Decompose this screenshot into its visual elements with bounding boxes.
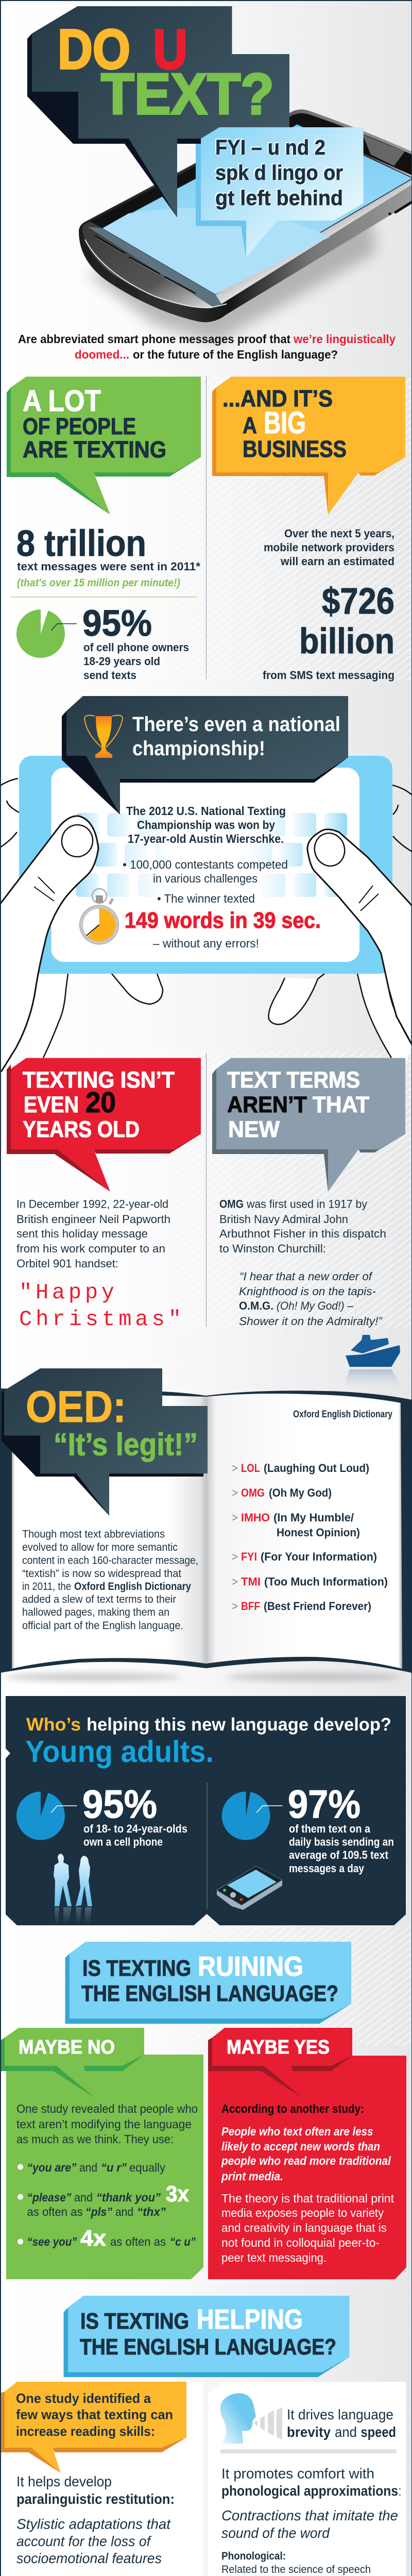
panel: texting isn't 20	[7, 1058, 201, 1332]
pie: 97 percent text daily	[222, 1792, 270, 1840]
list: dictionary terms: FYI	[241, 1550, 257, 1563]
text block: finding: likely to accept new words than	[221, 2140, 380, 2153]
text block: phonological approximations: Contractions that imitate the	[221, 2507, 398, 2523]
column divider	[206, 376, 207, 679]
forecast text	[264, 527, 394, 568]
list: usage stats: and	[115, 2205, 133, 2218]
text block: OMG origin: OMG	[219, 1197, 244, 1211]
stat caption: send texts	[83, 669, 136, 682]
speech bubble: national championship: There’s even a national	[132, 713, 340, 736]
text block: theory: not found in colloquial peer-to-	[221, 2236, 380, 2249]
text block: OMG origin: to Winston Churchill:	[219, 1242, 326, 1255]
text block: phonological approximations: sound of the word	[221, 2525, 330, 2541]
quote: Fisher dispatch	[239, 1270, 383, 1328]
championship text: • The winner texted	[157, 892, 255, 905]
panel: paralinguistic restitution: One study identified a	[16, 2391, 151, 2406]
stat: 95%: 95%	[82, 1783, 157, 1827]
text block: OMG origin: British Navy Admiral John	[219, 1213, 348, 1226]
speech bubble: national championship	[62, 696, 348, 815]
stat: 97%: 97%	[288, 1783, 360, 1827]
text block: OED paragraph: content in each 160-character message,	[22, 1555, 198, 1566]
panel: texting isn't 20: YEARS OLD	[23, 1117, 140, 1142]
championship text: – without any errors!	[153, 937, 259, 950]
heading: is texting helping: IS TEXTING	[80, 2309, 189, 2334]
text block: OMG origin: was first used in 1917 by	[246, 1197, 367, 1211]
intro question	[18, 332, 396, 361]
panel: big business: A	[243, 412, 257, 438]
text block: theory: peer text messaging.	[221, 2251, 327, 2264]
icon: stopwatch	[79, 889, 118, 944]
text block: definition	[221, 2550, 399, 2576]
list: dictionary terms: (For Your Information)	[261, 1550, 377, 1563]
text block: finding	[221, 2125, 391, 2183]
text block: definition: Phonological:	[221, 2550, 286, 2562]
list: usage stats: “see you”	[27, 2235, 77, 2248]
list: usage stats: “thx”	[137, 2205, 166, 2218]
list: usage stats: “c u”	[170, 2235, 196, 2248]
speech bubble: FYI: gt left behind	[215, 186, 343, 210]
list: usage stats: “you are”	[27, 2161, 77, 2174]
text block: restitution	[16, 2473, 175, 2566]
quote: Happy Christmas: "Happy	[19, 1280, 114, 1305]
stat caption: 18-29 years old	[83, 655, 160, 668]
list: dictionary terms: >	[232, 1575, 238, 1588]
championship text: Championship was won by	[137, 818, 275, 832]
championship text: 17-year-old Austin Wierschke.	[128, 832, 284, 845]
forecast text: Over the next 5 years,	[284, 527, 394, 540]
panel: brevity and phonological: brevity	[287, 2424, 331, 2440]
quote: Fisher dispatch: O.M.G.	[239, 1299, 273, 1312]
heading: is texting helping	[64, 2296, 349, 2377]
panel: brevity and phonological: speed	[360, 2424, 396, 2440]
text block: study: as much as we think. They use:	[16, 2132, 174, 2146]
list: dictionary terms: (Too Much Information)	[264, 1575, 388, 1588]
stat caption	[289, 1822, 394, 1875]
text block: restitution: paralinguistic restitution:	[16, 2491, 175, 2507]
heading: is texting helping: HELPING	[197, 2304, 303, 2335]
heading: is texting helping: THE ENGLISH LANGUAGE?	[80, 2334, 336, 2360]
list: dictionary terms: (Best Friend Forever)	[264, 1600, 371, 1613]
panel: text terms aren't new: AREN’T	[227, 1092, 307, 1117]
text block: another study: According to another study:	[221, 2102, 364, 2115]
phone illustration	[79, 109, 412, 343]
title: TEXT?: TEXT?	[101, 62, 274, 126]
list: dictionary terms: >	[232, 1600, 238, 1613]
stat caption: of cell phone owners	[83, 641, 189, 654]
stat caption	[83, 641, 189, 682]
list: usage stats: “please”	[27, 2191, 72, 2204]
text block: OMG origin: Arbuthnot Fisher in this dispatch	[219, 1227, 386, 1240]
panel: text terms aren't new: TEXT TERMS	[227, 1067, 360, 1093]
championship text	[123, 804, 321, 950]
list: usage stats	[18, 2161, 196, 2251]
list: dictionary terms: >	[232, 1550, 238, 1563]
panel: texting isn't 20: 20	[85, 1086, 116, 1119]
panel: paralinguistic restitution: few ways that texting can	[16, 2407, 173, 2422]
pie: 95 percent	[16, 609, 65, 658]
list: dictionary terms: >	[232, 1511, 238, 1524]
list: dictionary terms: OMG	[241, 1486, 265, 1499]
stat caption: of 18- to 24-year-olds	[83, 1822, 187, 1835]
list: usage stats: 3x	[166, 2181, 189, 2207]
quote: Happy Christmas	[19, 1280, 181, 1332]
panel: big business: BIG	[264, 405, 306, 440]
list: usage stats: equally	[129, 2161, 165, 2174]
text block: study	[16, 2102, 198, 2146]
panel: brevity and phonological	[208, 2382, 406, 2576]
panel: maybe yes	[208, 2028, 406, 2279]
list: dictionary terms: (In My Humble/	[273, 1511, 354, 1524]
stat: 149 words: 149 words in 39 sec.	[125, 908, 321, 933]
championship text: The 2012 U.S. National Texting	[126, 804, 286, 818]
quote: Happy Christmas: Christmas"	[19, 1307, 181, 1332]
text block: first text: In December 1992, 22-year-old	[16, 1197, 168, 1211]
text block: theory: and creativity in language that is	[221, 2221, 387, 2234]
panel: open book	[0, 1368, 412, 1681]
text block: study: text aren’t modifying the language	[16, 2117, 192, 2131]
panel: young adults: helping this new language develop?	[87, 1715, 391, 1735]
list: usage stats: as often as	[27, 2205, 82, 2218]
stat note: (that's over 15 million per minute!)	[17, 577, 180, 589]
stat: $726 billion: $726	[322, 581, 394, 622]
icon: silhouettes	[54, 1854, 92, 1924]
intro question: or the future of the English language?	[133, 348, 338, 361]
panel: young adults: Who’s	[26, 1715, 81, 1735]
speech bubble: FYI: FYI – u nd 2	[215, 135, 325, 159]
forecast text: mobile network providers	[264, 541, 394, 554]
text block: finding: print media.	[221, 2170, 283, 2183]
speech bubble: FYI	[196, 127, 364, 258]
text block: study: One study revealed that people who	[16, 2102, 198, 2115]
list: dictionary terms: LOL	[241, 1462, 260, 1475]
stat: 95%: 95%	[82, 603, 152, 644]
list: dictionary terms: IMHO	[241, 1511, 270, 1524]
panel: young adults: Young adults.	[25, 1735, 214, 1769]
list: dictionary terms: BFF	[241, 1600, 260, 1613]
quote: Fisher dispatch: Shower it on the Admiralty!”	[239, 1315, 383, 1328]
panel: a lot of people	[7, 377, 201, 682]
heading: is texting ruining: IS TEXTING	[82, 1956, 191, 1981]
list: usage stats: “pls”	[85, 2205, 112, 2218]
text block: restitution: It helps develop	[16, 2473, 112, 2489]
panel: big business: ...AND IT’S	[222, 385, 333, 412]
list: dictionary terms: TMI	[241, 1575, 261, 1588]
panel: paralinguistic restitution: increase reading skills:	[16, 2424, 155, 2439]
text block: restitution: Stylistic adaptations that	[16, 2516, 171, 2532]
text block: OED paragraph: “textish” is now so widespread that	[22, 1568, 181, 1580]
panel: a lot of people: A LOT	[23, 384, 101, 418]
text block: OMG origin	[219, 1197, 386, 1255]
panel: maybe no	[1, 2028, 203, 2279]
list: dictionary terms: >	[232, 1486, 238, 1499]
forecast text: will earn an estimated	[280, 555, 394, 568]
icon: speaking head	[220, 2393, 282, 2444]
speech bubble: OED	[2, 1368, 208, 1516]
intro question: doomed...	[75, 348, 129, 361]
text block: theory: media exposes people to variety	[221, 2206, 384, 2219]
text block: OED paragraph	[22, 1528, 198, 1632]
panel: maybe no: MAYBE NO	[19, 2037, 115, 2058]
stat caption: daily basis sending an	[289, 1835, 394, 1849]
text block: OED paragraph: hallowed pages, making them an	[22, 1606, 169, 1618]
text block: OED paragraph: added a slew of text terms to their	[22, 1594, 176, 1605]
text block: first text	[16, 1197, 170, 1270]
text block: OED paragraph: official part of the English language.	[22, 1620, 183, 1632]
text block: theory	[221, 2192, 394, 2264]
speech bubble: national championship: championship!	[132, 737, 265, 760]
text block: restitution: account for the loss of	[16, 2533, 152, 2549]
illustration: phone keypad	[19, 756, 392, 974]
panel: texting isn't 20: EVEN	[24, 1092, 79, 1117]
stat: $726 billion: billion	[299, 621, 394, 661]
icon: trophy	[84, 715, 123, 758]
text block: first text: from his work computer to an	[16, 1242, 165, 1255]
panel: big business: BUSINESS	[243, 436, 347, 462]
panel: text terms aren't new	[212, 1058, 405, 1389]
illustration: hands behind phone	[0, 778, 412, 1061]
championship text: • 100,000 contestants competed	[123, 858, 288, 871]
text block: first text: British engineer Neil Papworth	[16, 1213, 170, 1226]
heading: is texting ruining: THE ENGLISH LANGUAGE?	[81, 1981, 338, 2006]
stat: 8 trillion: 8 trillion	[16, 523, 146, 564]
pie: 95 percent own a phone	[16, 1792, 65, 1840]
stat caption	[83, 1822, 187, 1849]
panel: maybe yes: MAYBE YES	[227, 2037, 330, 2058]
intro question: we’re linguistically	[293, 332, 396, 346]
text block: finding: People who text often are less	[221, 2125, 373, 2138]
text block: OED paragraph: in 2011, the	[22, 1581, 71, 1592]
text block: OED paragraph: evolved to allow for more semantic	[22, 1541, 178, 1553]
panel: paralinguistic restitution	[1, 2382, 203, 2576]
heading: is texting ruining: RUINING	[198, 1951, 303, 1982]
championship text: in various challenges	[153, 872, 258, 885]
stat: $726 billion	[299, 581, 394, 661]
title: U: U	[153, 18, 187, 81]
speech bubble: OED: “It’s legit!”	[54, 1427, 198, 1462]
quote: Fisher dispatch: Knighthood is on the tapis-	[239, 1285, 376, 1298]
list: usage stats: as often as	[110, 2235, 166, 2248]
panel: a lot of people: ARE TEXTING	[23, 436, 166, 463]
quote: Fisher dispatch: (Oh! My God!) –	[277, 1299, 354, 1312]
illustration: thumbs	[0, 816, 412, 1071]
list: usage stats: and	[79, 2161, 97, 2174]
list: usage stats: 4x	[80, 2226, 107, 2251]
list: dictionary terms: >	[232, 1462, 238, 1475]
stat caption: text messages were sent in 2011*	[17, 560, 200, 573]
column divider	[206, 1053, 207, 1327]
text block: phonological approximations	[221, 2466, 401, 2541]
stat caption: from SMS text messaging	[263, 669, 394, 682]
text block: definition: Related to the science of speech	[221, 2564, 371, 2575]
text block: theory: The theory is that traditional print	[221, 2192, 394, 2205]
icon: small phone	[217, 1866, 282, 1910]
text block: restitution: socioemotional features	[16, 2550, 162, 2566]
panel: text terms aren't new: THAT	[313, 1092, 369, 1117]
panel: texting isn't 20: TEXTING ISN’T	[23, 1067, 175, 1093]
list: dictionary terms: (Oh My God)	[269, 1486, 332, 1499]
list: usage stats: “u r”	[101, 2161, 127, 2174]
list: usage stats: “thank you”	[96, 2191, 161, 2204]
heading: is texting ruining	[65, 1942, 351, 2024]
text block: phonological approximations: It promotes comfort with	[221, 2466, 374, 2482]
panel: big business	[212, 377, 405, 682]
quote: Fisher dispatch: “I hear that a new order of	[239, 1270, 373, 1283]
text block: first text: sent this holiday message	[16, 1227, 148, 1240]
text block: finding: people who read more traditional	[221, 2154, 391, 2167]
list: dictionary terms: Honest Opinion)	[277, 1526, 360, 1539]
text block: first text: Orbitel 901 handset:	[16, 1257, 118, 1270]
stat caption: messages a day	[289, 1862, 365, 1875]
list: dictionary terms: (Laughing Out Loud)	[264, 1462, 369, 1475]
speech bubble: title	[27, 6, 289, 217]
dictionary label: Oxford English Dictionary	[293, 1409, 392, 1420]
stat caption: of them text on a	[289, 1822, 371, 1835]
intro question: Are abbreviated smart phone messages proof that	[18, 332, 290, 346]
stat caption: average of 109.5 text	[289, 1849, 389, 1861]
panel: brevity and phonological: and	[335, 2424, 357, 2440]
panel: brevity and phonological: It drives language	[287, 2406, 393, 2422]
text block: OED paragraph: Though most text abbreviations	[22, 1528, 165, 1540]
title: DO: DO	[58, 18, 130, 81]
text block: phonological approximations: :	[399, 2483, 401, 2499]
speech bubble: FYI: spk d lingo or	[215, 161, 343, 184]
stat caption: own a cell phone	[83, 1835, 163, 1849]
panel: text terms aren't new: NEW	[228, 1117, 280, 1142]
list: dictionary terms	[232, 1462, 388, 1613]
speech bubble: OED: OED:	[26, 1382, 126, 1432]
icon: ship	[346, 1335, 400, 1389]
panel: a lot of people: OF PEOPLE	[23, 413, 136, 439]
panel: young adults	[6, 1696, 406, 1925]
text block: OED paragraph: Oxford English Dictionary	[74, 1581, 191, 1592]
list: usage stats: and	[74, 2191, 93, 2204]
